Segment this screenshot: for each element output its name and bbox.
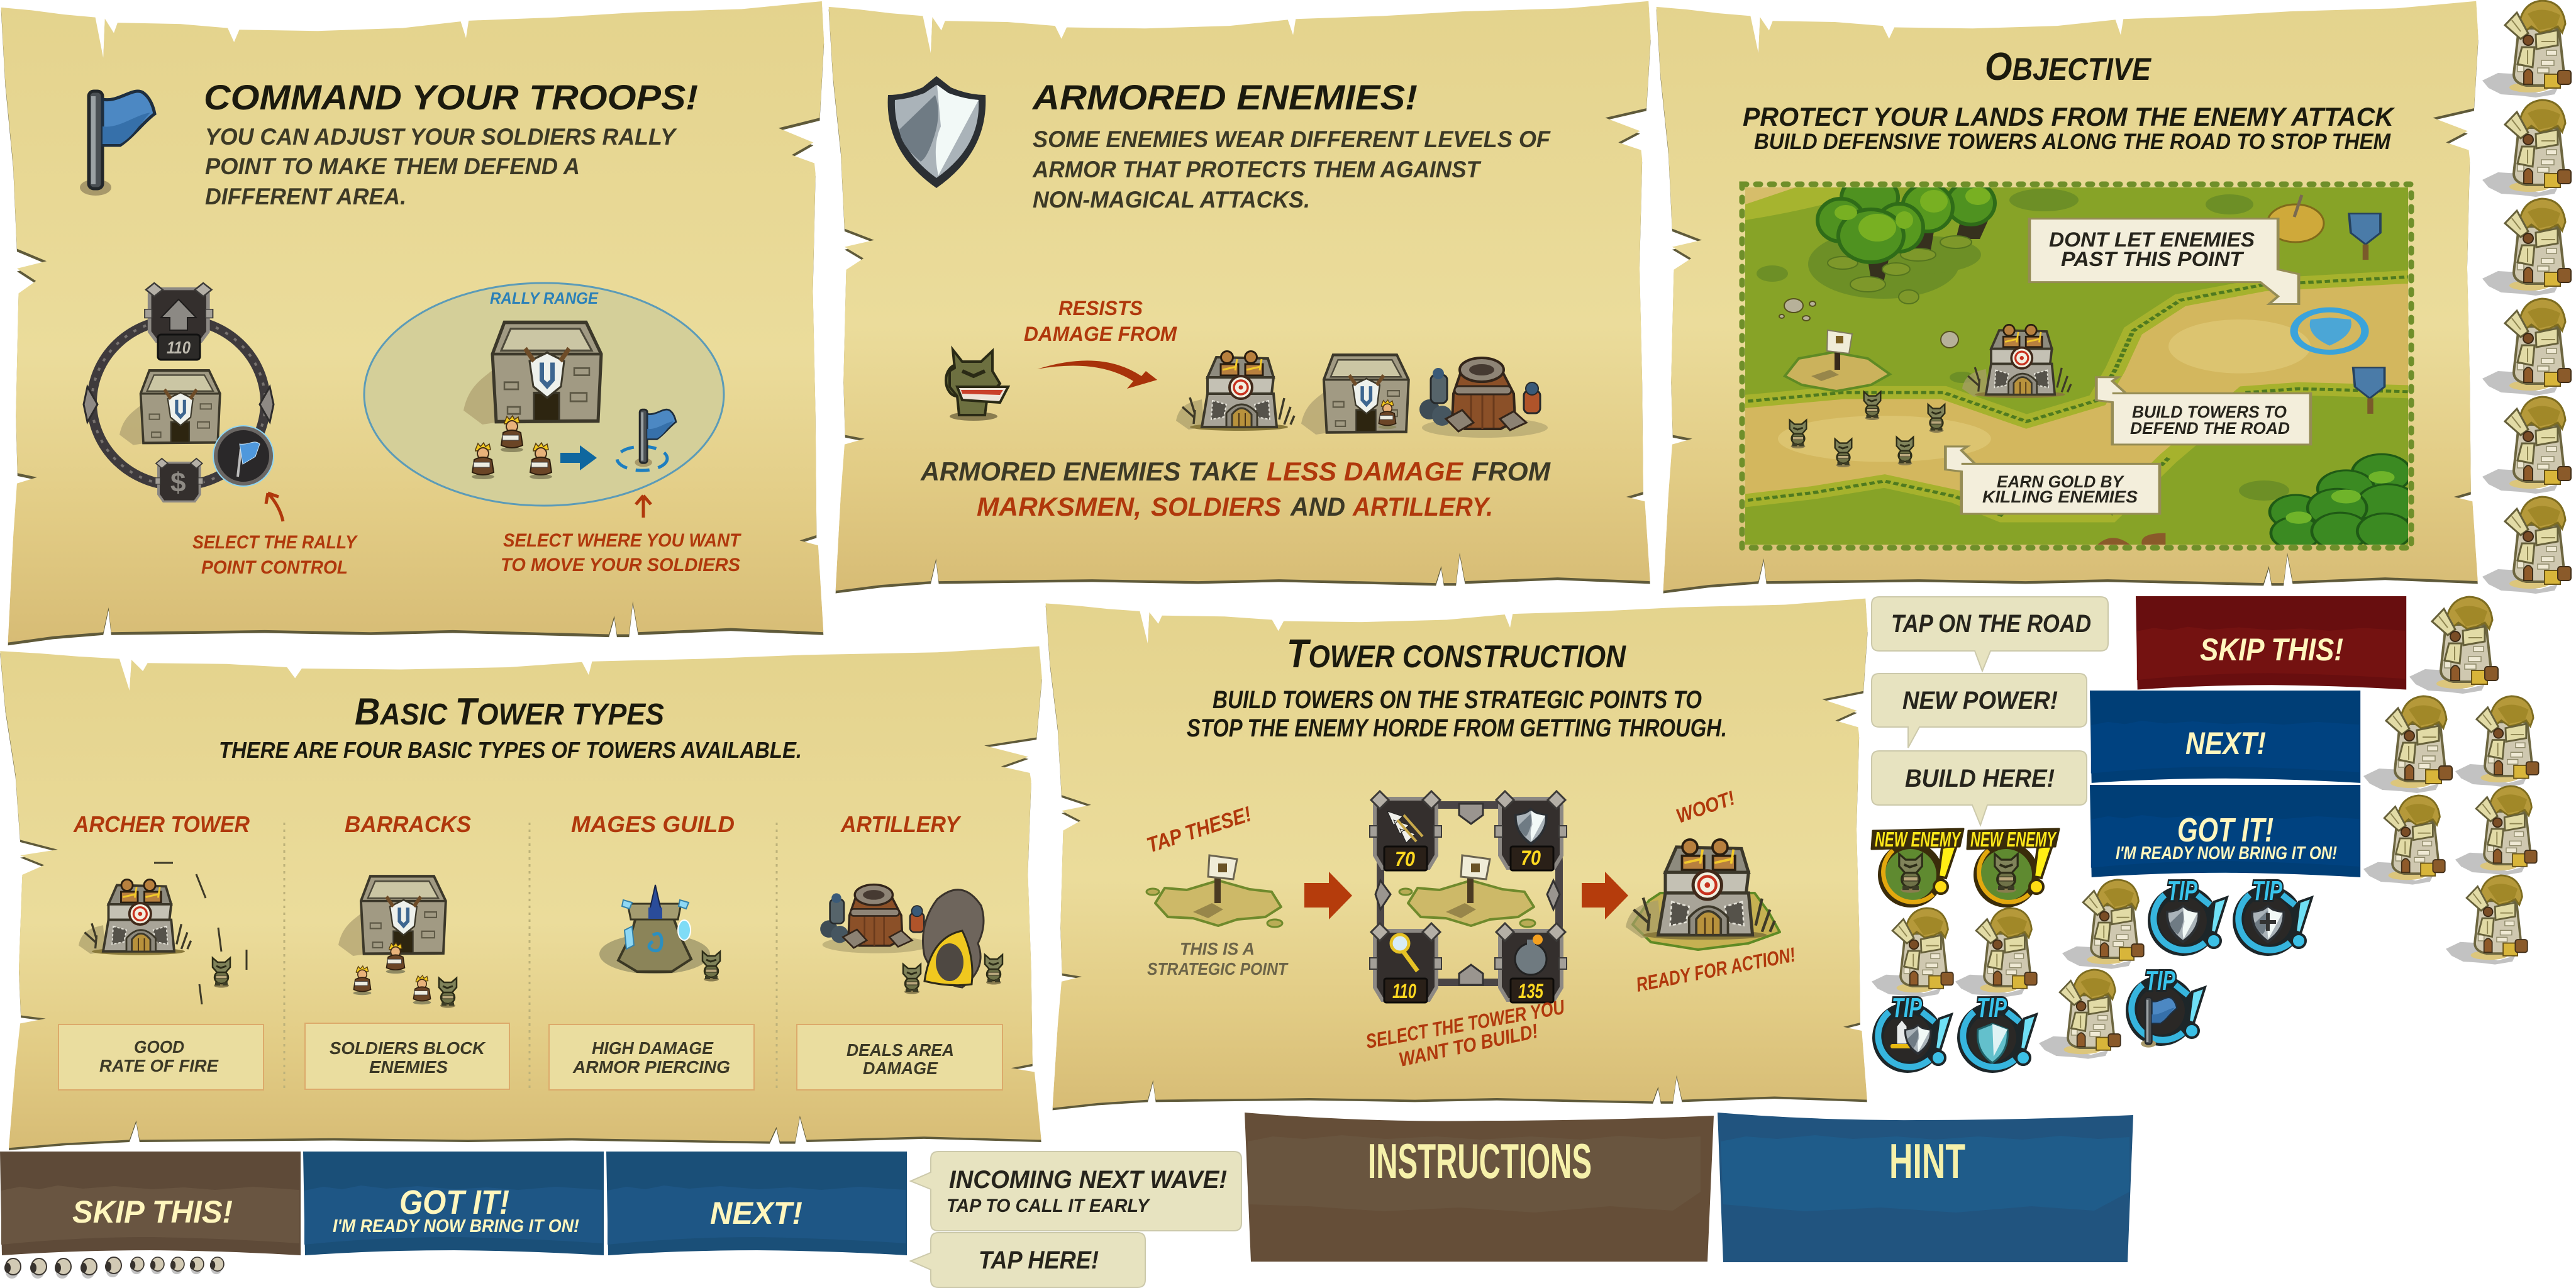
- subtitle: PROTECT YOUR LANDS FROM THE ENEMY ATTACK: [1743, 102, 2396, 131]
- button: skip this red: SKIP THIS!: [2200, 632, 2343, 667]
- button: got it dark blue: I'M READY NOW BRING IT ON!: [2116, 843, 2337, 863]
- description text: [99, 1037, 954, 1078]
- badge: new enemy 2: NEW ENEMY: [1970, 828, 2057, 851]
- caption: strategic point: THIS IS A: [1180, 939, 1255, 958]
- tower illustrations: [79, 863, 1002, 1008]
- description text: [205, 124, 677, 209]
- upgrade ring menu: [84, 283, 274, 501]
- button: skip this brown: [0, 1152, 301, 1255]
- caption: strategic point: STRATEGIC POINT: [1147, 959, 1289, 979]
- button: skip this red: [2136, 596, 2406, 689]
- speech bubble: tap here: TAP HERE!: [979, 1246, 1099, 1274]
- description text: ARMOR PIERCING: [572, 1057, 730, 1077]
- speech bubble: build here: [1872, 751, 2087, 825]
- subtitle: BUILD DEFENSIVE TOWERS ALONG THE ROAD TO STOP THEM: [1754, 130, 2391, 154]
- arrow: to finished tower: [1582, 872, 1628, 919]
- rally range area: RALLY RANGE: [490, 289, 599, 308]
- speech bubble: incoming next wave: TAP TO CALL IT EARLY: [947, 1196, 1151, 1216]
- description text: YOU CAN ADJUST YOUR SOLDIERS RALLY: [205, 124, 677, 150]
- column headings: ARTILLERY: [840, 811, 962, 837]
- column headings: ARCHER TOWER: [73, 811, 250, 837]
- button: got it dark blue: GOT IT!: [2177, 811, 2273, 849]
- column headings: [73, 811, 962, 837]
- description text: DIFFERENT AREA.: [205, 184, 406, 209]
- arrow: to build menu: [1304, 872, 1352, 919]
- subtitle: BUILD TOWERS ON THE STRATEGIC POINTS TO: [1213, 686, 1702, 714]
- description text: POINT TO MAKE THEM DEFEND A: [205, 153, 580, 179]
- build menu: 135: [1518, 980, 1544, 1002]
- button: got it blue: [303, 1152, 604, 1255]
- banner: instructions: INSTRUCTIONS: [1368, 1133, 1592, 1189]
- panel: command your troops: [1, 1, 824, 645]
- title: TOWER CONSTRUCTION: [1287, 631, 1626, 676]
- button: skip this brown: SKIP THIS!: [72, 1194, 233, 1230]
- description text: HIGH DAMAGE: [592, 1038, 714, 1058]
- banner: hint: [1718, 1113, 2133, 1262]
- description text: NON-MAGICAL ATTACKS.: [1033, 187, 1310, 213]
- map: PAST THIS POINT: [2061, 248, 2245, 270]
- caption: rally control: SELECT THE RALLY: [192, 532, 358, 553]
- sheep row: [4, 1257, 224, 1279]
- speech bubble: incoming next wave: INCOMING NEXT WAVE!: [949, 1166, 1227, 1194]
- summary text: LESS DAMAGE: [1267, 457, 1464, 486]
- upgrade ring menu: $: [170, 467, 186, 498]
- caption: tap these: TAP THESE!: [1144, 802, 1254, 858]
- description text: [1032, 126, 1551, 213]
- summary text: MARKSMEN,: [977, 492, 1141, 521]
- subtitle: [1187, 686, 1727, 742]
- icon: rally flag: [80, 91, 155, 196]
- caption: select tower: SELECT THE TOWER YOU: [1364, 996, 1567, 1053]
- button: got it blue: GOT IT!: [399, 1184, 509, 1221]
- panel: basic tower types: [0, 647, 1042, 1150]
- arrow: resist: [1037, 360, 1157, 389]
- speech bubble: tap on the road: TAP ON THE ROAD: [1891, 610, 2091, 638]
- build menu: 70: [1395, 848, 1415, 870]
- subtitle: [1743, 102, 2396, 154]
- panel: armored enemies: [829, 1, 1651, 593]
- tip badges: [1872, 875, 2312, 1073]
- caption: select tower: WANT TO BUILD!: [1397, 1019, 1540, 1071]
- tip badges: TIP: [2252, 875, 2282, 906]
- button: next dark blue: [2090, 691, 2360, 783]
- summary text: ARMORED ENEMIES TAKE: [920, 457, 1258, 486]
- caption: strategic point: [1147, 939, 1289, 979]
- speech bubble: tap on the road: [1872, 597, 2108, 671]
- badge: new enemy 1: NEW ENEMY: [1875, 828, 1962, 851]
- summary text: AND: [1290, 492, 1345, 521]
- column headings: MAGES GUILD: [571, 811, 735, 837]
- caption: select tower: [1364, 996, 1567, 1071]
- speech bubble: new power: [1872, 674, 2087, 748]
- strategic point: [1146, 855, 1282, 927]
- map: KILLING ENEMIES: [1982, 487, 2138, 506]
- caption: resists damage: RESISTS: [1058, 297, 1143, 319]
- map: [1707, 175, 2441, 550]
- summary text: ARTILLERY.: [1352, 492, 1493, 521]
- description text: ENEMIES: [369, 1057, 448, 1077]
- banner: hint: HINT: [1889, 1133, 1965, 1189]
- build menu: 110: [1392, 980, 1416, 1002]
- rally range area: [364, 283, 724, 506]
- title: COMMAND YOUR TROOPS!: [204, 77, 698, 117]
- title: OBJECTIVE: [1985, 45, 2151, 89]
- badge: new enemy 1: [1872, 828, 1963, 908]
- caption: move soldiers: TO MOVE YOUR SOLDIERS: [501, 555, 740, 575]
- caption: move soldiers: [501, 530, 741, 575]
- description text: GOOD: [134, 1037, 184, 1057]
- caption: rally control: POINT CONTROL: [201, 557, 348, 578]
- speech bubble: new power: NEW POWER!: [1902, 687, 2058, 714]
- arrow: to rally control: [266, 493, 283, 521]
- icon: armored goblin: [946, 350, 1008, 421]
- summary text: SOLDIERS: [1151, 492, 1281, 521]
- tip badges: TIP: [2167, 875, 2197, 906]
- column of windmills: [2482, 1, 2571, 594]
- title: BASIC TOWER TYPES: [355, 691, 664, 733]
- description text: RATE OF FIRE: [99, 1056, 219, 1075]
- map: EARN GOLD BY: [1997, 472, 2125, 491]
- caption: rally control: [192, 532, 358, 578]
- subtitle: STOP THE ENEMY HORDE FROM GETTING THROUGH.: [1187, 714, 1727, 742]
- map: BUILD TOWERS TO: [2132, 402, 2287, 421]
- speech bubble: incoming next wave: [911, 1152, 1241, 1231]
- description text: SOLDIERS BLOCK: [330, 1038, 486, 1058]
- tip badges: TIP: [2145, 965, 2175, 996]
- badge: new enemy 2: [1967, 828, 2059, 908]
- summary text: FROM: [1472, 457, 1551, 486]
- tip badges: TIP: [1977, 992, 2007, 1023]
- description boxes: [58, 1023, 1002, 1090]
- description text: ARMOR THAT PROTECTS THEM AGAINST: [1032, 157, 1482, 182]
- tip badges: TIP: [1892, 992, 1922, 1023]
- arrow: to flag: [636, 496, 651, 518]
- subtitle: THERE ARE FOUR BASIC TYPES OF TOWERS AVAILABLE.: [219, 737, 802, 763]
- tower row: [1176, 351, 1548, 438]
- icon: shield: [888, 76, 985, 188]
- build menu: 70: [1521, 847, 1541, 869]
- panel: objective: [1657, 1, 2479, 593]
- scattered windmills: [1872, 597, 2539, 1059]
- finished archer tower: [1626, 840, 1780, 950]
- title: ARMORED ENEMIES!: [1031, 77, 1418, 117]
- button: next dark blue: NEXT!: [2185, 726, 2266, 761]
- caption: resists damage: [1024, 297, 1177, 345]
- description text: DAMAGE: [863, 1058, 938, 1078]
- speech bubble: build here: BUILD HERE!: [1905, 765, 2055, 792]
- build menu: [1370, 791, 1567, 1002]
- summary text: [920, 457, 1551, 521]
- button: next blue: [606, 1152, 907, 1255]
- banner: instructions: [1245, 1113, 1714, 1262]
- panel: tower construction: [1046, 599, 1868, 1110]
- description text: SOME ENEMIES WEAR DIFFERENT LEVELS OF: [1033, 126, 1551, 152]
- map: DONT LET ENEMIES: [2049, 228, 2255, 251]
- column headings: BARRACKS: [345, 811, 471, 837]
- caption: woot: WOOT!: [1674, 786, 1738, 828]
- description text: DEALS AREA: [847, 1040, 954, 1060]
- caption: move soldiers: SELECT WHERE YOU WANT: [503, 530, 741, 551]
- button: next blue: NEXT!: [710, 1196, 802, 1231]
- button: got it dark blue: [2090, 785, 2360, 877]
- upgrade ring menu: 110: [167, 338, 191, 357]
- map: DEFEND THE ROAD: [2130, 419, 2290, 438]
- caption: ready for action: READY FOR ACTION!: [1634, 943, 1797, 996]
- caption: resists damage: DAMAGE FROM: [1024, 323, 1177, 345]
- button: got it blue: I'M READY NOW BRING IT ON!: [333, 1216, 579, 1236]
- speech bubble: tap here: [911, 1233, 1145, 1287]
